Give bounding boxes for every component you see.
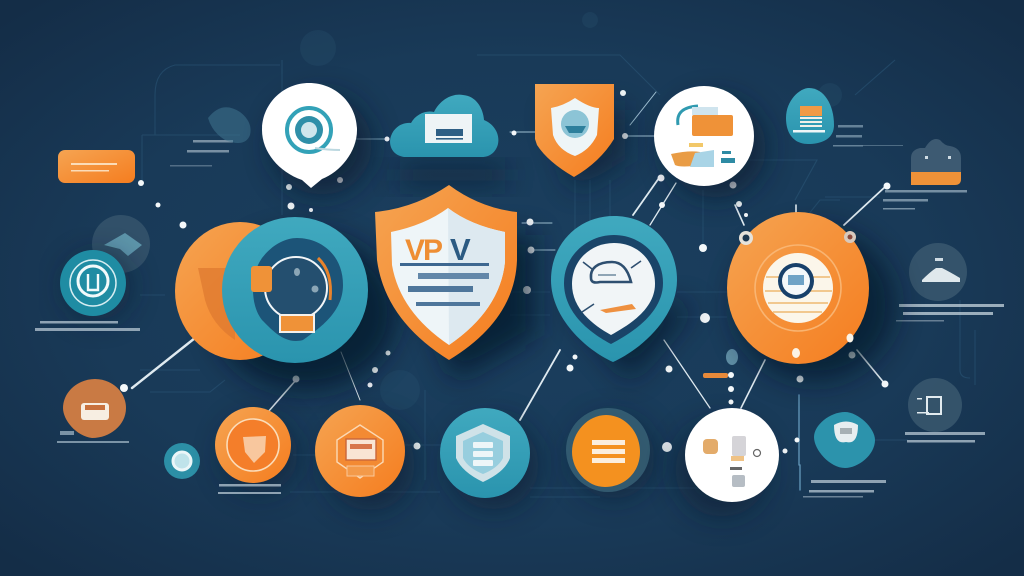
caption: far right bottom bbox=[905, 432, 985, 442]
small orange dash bbox=[703, 373, 728, 378]
connector dots bbox=[120, 90, 890, 454]
icon: speech bubble bbox=[262, 83, 372, 195]
caption: bottom right under bell bbox=[803, 480, 886, 498]
caption: bottom centre-left bbox=[218, 484, 281, 494]
title text: VPV: VP bbox=[405, 234, 442, 267]
icon: orange face badge bbox=[215, 407, 298, 493]
icon: bottom brown-orange badge bbox=[63, 379, 126, 438]
icon: big teal headset disc bbox=[222, 217, 368, 363]
icon: orange screen badge bbox=[315, 405, 415, 511]
icon: orange list globe bbox=[566, 408, 655, 499]
icon: left teal badge bbox=[60, 215, 150, 320]
icon: teal shield badge bbox=[440, 408, 539, 510]
faint background circuitry bbox=[140, 55, 975, 497]
icon: teal document blob bbox=[786, 88, 834, 144]
icon: teal bell bbox=[814, 412, 875, 468]
icon: cloud bbox=[390, 95, 505, 185]
faint background blobs bbox=[300, 12, 842, 410]
caption: bottom left bbox=[57, 431, 129, 443]
caption: right upper bbox=[883, 190, 967, 210]
icon: teal location pin bbox=[551, 216, 695, 380]
caption: left bbox=[35, 321, 140, 331]
icon: white folder circle bbox=[654, 86, 766, 198]
icon: rivets on orange disc bbox=[739, 231, 856, 358]
icon: grey right bubble bbox=[909, 243, 967, 301]
icon: top orange shield bbox=[535, 84, 625, 190]
caption: top right bbox=[833, 125, 903, 146]
icon: grey document bubble bbox=[908, 378, 962, 432]
icon: main VPV shield: V bbox=[450, 232, 471, 267]
caption: upper left bbox=[170, 140, 233, 166]
icon: ghost figure bbox=[208, 107, 251, 143]
caption: right middle bbox=[896, 304, 1004, 322]
connector lines bbox=[132, 92, 886, 490]
icon: big orange target disc bbox=[727, 212, 895, 381]
icon: white document circle bbox=[675, 408, 779, 517]
icon: orange label pill bbox=[58, 150, 135, 183]
small bluish bead bbox=[726, 349, 738, 365]
icon: dark case with orange band bbox=[911, 139, 961, 185]
icon: big orange headset disc bbox=[175, 217, 397, 390]
icon: main VPV shield bbox=[375, 185, 535, 380]
icon: small teal ring bbox=[164, 443, 200, 479]
